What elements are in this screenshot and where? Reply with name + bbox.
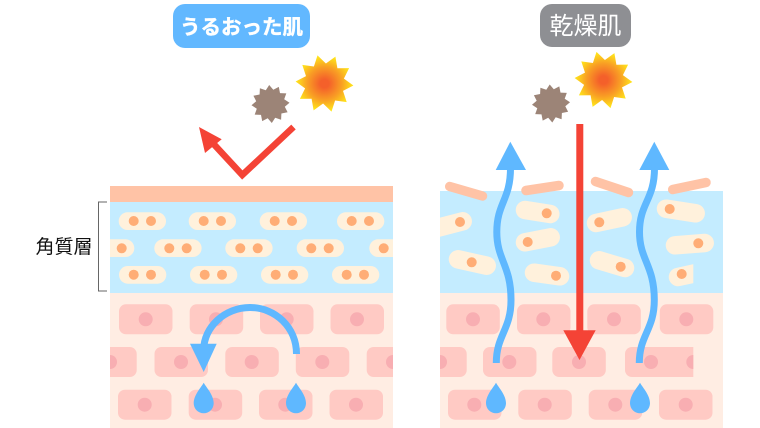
- arrow: reflected rays: [199, 127, 294, 175]
- icon: sun left: [296, 55, 353, 112]
- heading: dry skin: 乾燥肌: [550, 13, 622, 40]
- icon: pollutant right: [532, 84, 570, 122]
- bracket: stratum corneum: [98, 202, 107, 291]
- icon: water drop: [630, 383, 650, 413]
- panel: moisturized skin cross-section: [110, 186, 393, 428]
- arrow: evaporating moisture left: [496, 142, 526, 363]
- heading: moisturized skin: [173, 4, 310, 48]
- arrow: evaporating moisture right: [639, 142, 669, 363]
- icon: pollutant left: [252, 85, 290, 123]
- panel: dry skin cross-section: [425, 182, 723, 428]
- heading: moisturized skin: うるおった肌: [180, 16, 303, 39]
- arrow: retained moisture: [190, 308, 296, 372]
- icon: water drop: [486, 383, 506, 413]
- arrow: penetrating rays: [563, 124, 596, 360]
- label: stratum corneum: 角質層: [36, 236, 93, 258]
- heading: dry skin: [540, 4, 631, 47]
- icon: water drop: [286, 383, 306, 413]
- icon: water drop: [194, 383, 214, 413]
- icon: sun right: [575, 52, 632, 108]
